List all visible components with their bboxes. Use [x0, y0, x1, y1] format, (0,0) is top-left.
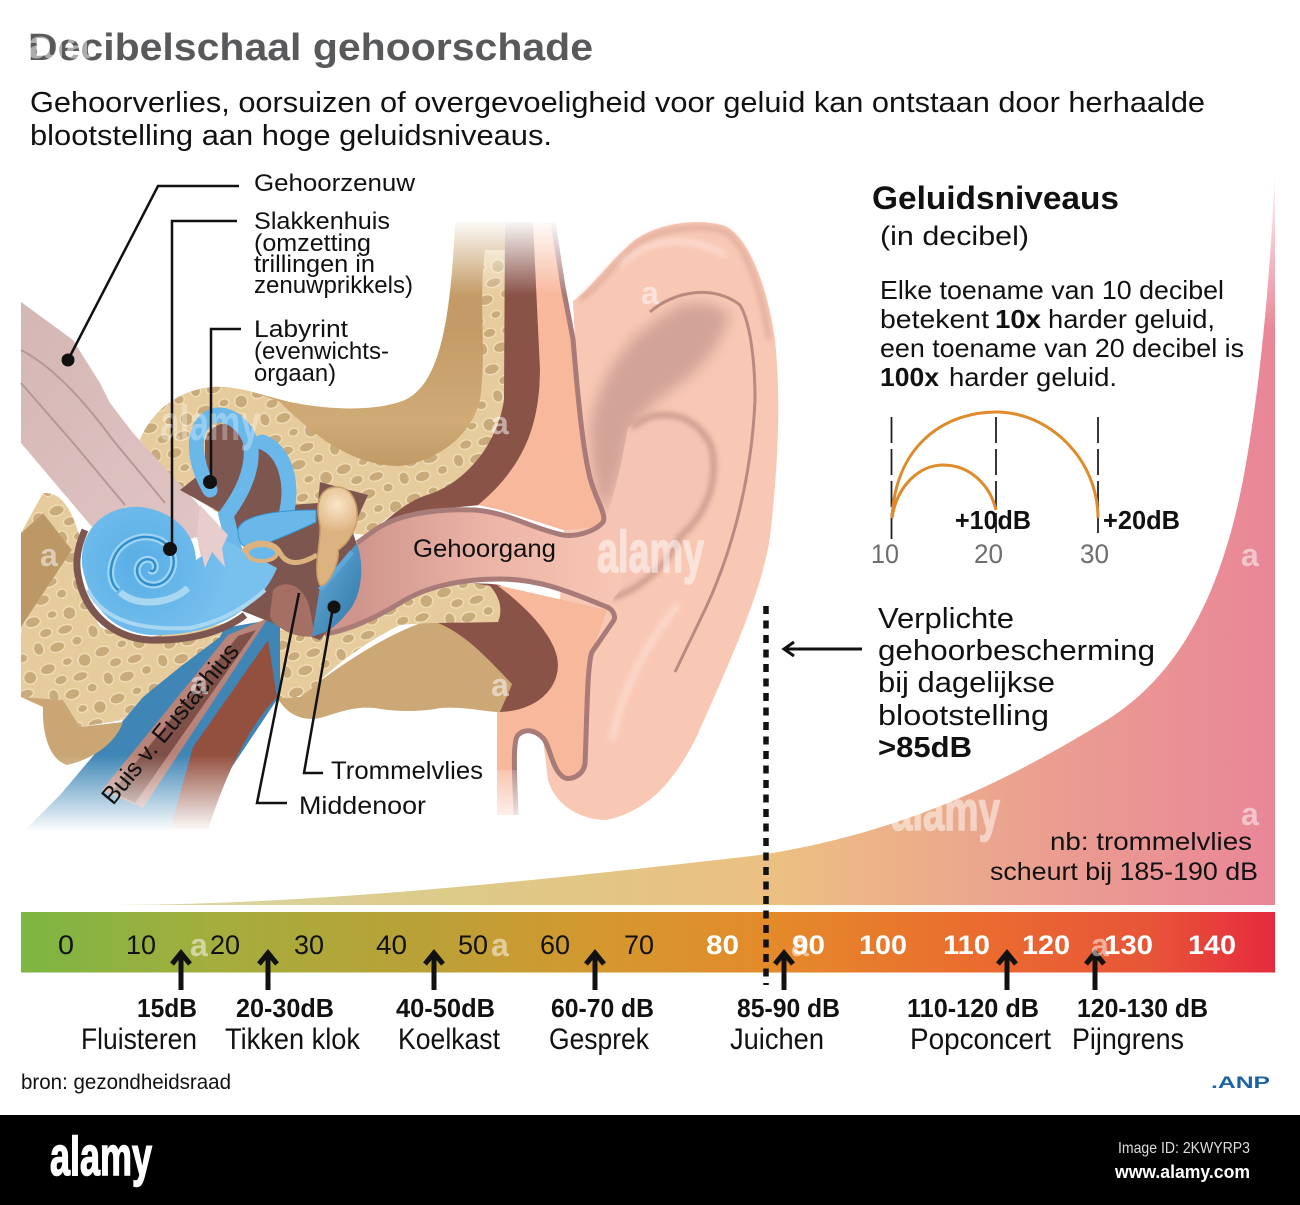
example: cheering: 85-90 dB	[737, 993, 840, 1023]
left bone, tan lump	[21, 697, 123, 765]
example: whisper	[81, 993, 197, 1056]
watermarks: alamy	[597, 520, 704, 585]
label: Labyrint	[254, 316, 389, 387]
example: pain threshold: 120-130 dB	[1077, 993, 1208, 1023]
watermarks: ala	[28, 23, 91, 67]
decibel scale numbers: 90	[792, 930, 825, 960]
outer ear (pinna)	[543, 222, 778, 820]
nerve fan fibres	[197, 505, 228, 568]
exponential loudness curve background	[100, 165, 1280, 905]
callout: mandatory hearing protection: gehoorbescherming	[878, 635, 1155, 667]
intro text: Gehoorverlies, oorsuizen of overgevoeligheid voor geluid kan ontstaan door herhaalde	[30, 87, 1205, 119]
label: Slakkenhuis: zenuwprikkels)	[254, 272, 413, 299]
concha bowl	[594, 414, 715, 600]
decibel scale numbers: 120	[1022, 930, 1070, 960]
threshold dotted line at 85 dB	[763, 606, 769, 985]
logo: ANP: .ANP	[1211, 1073, 1270, 1092]
example: ticking clock	[225, 993, 361, 1056]
note: eardrum rupture	[990, 828, 1258, 886]
label: Middenoor: Middenoor	[299, 792, 426, 820]
watermarks	[28, 23, 1259, 963]
middle ear cavity	[180, 424, 368, 640]
left bone, spongy	[21, 493, 227, 727]
leader: Gehoorzenuw	[62, 186, 239, 366]
helix rim shading	[580, 228, 769, 340]
example: cheering: Juichen	[730, 1023, 824, 1056]
decibel scale numbers: 30	[294, 930, 324, 960]
label: Labyrint: orgaan)	[254, 360, 336, 387]
example: fridge: 40-50dB	[396, 993, 495, 1023]
dark tissue above canal	[375, 222, 540, 530]
label: Slakkenhuis: Slakkenhuis	[254, 208, 390, 235]
example: whisper: Fluisteren	[81, 1023, 197, 1056]
concha shadow	[590, 303, 730, 515]
decibel scale numbers: 110	[943, 930, 990, 960]
explanation: Elke toename van 10 decibel	[880, 275, 1224, 305]
skin tissue below canal	[497, 585, 607, 815]
decibel arc diagram: 20	[974, 539, 1003, 569]
callout: mandatory hearing protection	[878, 603, 1155, 764]
explanation: 10x	[995, 304, 1042, 334]
label: Slakkenhuis: trillingen in	[254, 251, 375, 278]
leader: Labyrint	[203, 329, 241, 489]
example: pop concert: 110-120 dB	[907, 993, 1039, 1023]
watermarks: a	[1241, 796, 1259, 832]
antihelix rim line	[650, 292, 755, 672]
decibel scale numbers: 40	[376, 930, 407, 960]
leader: Slakkenhuis	[163, 221, 237, 556]
fade at bottom of section	[15, 755, 295, 833]
label: Buis v. Eustachius: Buis v. Eustachius	[96, 638, 245, 810]
watermarks: a	[641, 275, 659, 311]
malleus and incus	[317, 487, 357, 586]
example: pain threshold: Pijngrens	[1072, 1023, 1184, 1056]
helix highlight	[620, 241, 725, 265]
lower bone, spongy	[263, 583, 500, 698]
eardrum	[312, 543, 361, 636]
example: pop concert: Popconcert	[910, 1023, 1052, 1056]
decibel scale numbers: 20	[210, 930, 240, 960]
example: conversation: Gesprek	[549, 1023, 650, 1056]
example: cheering	[730, 993, 840, 1056]
decibel scale numbers: 140	[1188, 930, 1236, 960]
fade under ear lobe	[490, 770, 524, 830]
example: conversation: 60-70 dB	[551, 993, 654, 1023]
Eustachian tube, wall	[102, 618, 268, 808]
temporal bone, spongy layer	[140, 250, 506, 535]
arrow: callout to threshold line	[784, 642, 862, 656]
decibel colour bar	[21, 912, 1275, 972]
watermarks: alamy	[160, 395, 260, 451]
watermarks: a	[1241, 537, 1259, 573]
watermarks: a	[791, 927, 809, 963]
lower bone, tan	[277, 620, 512, 719]
bowl rim shadow	[612, 415, 714, 598]
footer logo: alamy	[50, 1125, 152, 1187]
watermarks: a	[190, 927, 208, 963]
label: Labyrint: (evenwichts-	[254, 338, 389, 365]
temporal bone, tan layer	[140, 222, 506, 500]
ear anatomy illustration	[15, 216, 778, 833]
decibel arc diagram: 30	[1080, 539, 1109, 569]
heading: Geluidsniveaus	[872, 180, 1119, 216]
canal base blob	[238, 510, 316, 548]
explanation: een toename van 20 decibel is	[880, 333, 1244, 363]
explanation: 100x	[880, 362, 940, 392]
middle ear tissue	[270, 584, 315, 637]
watermarks: a	[190, 665, 208, 701]
note: eardrum rupture: scheurt bij 185-190 dB	[990, 858, 1258, 886]
sub heading: (in decibel)	[880, 221, 1029, 251]
decibel scale numbers: 0	[58, 930, 74, 960]
watermarks: a	[491, 927, 509, 963]
source: bron: gezondheidsraad	[21, 1071, 231, 1094]
decibel scale numbers	[58, 930, 1236, 960]
skin tissue above canal	[478, 222, 603, 530]
cochlea	[77, 507, 277, 640]
explanation: harder geluid.	[949, 362, 1117, 392]
tissue below canal	[430, 583, 558, 712]
label: Gehoorgang: Gehoorgang	[413, 535, 556, 563]
leader: Middenoor	[257, 593, 299, 803]
note: eardrum rupture: nb: trommelvlies	[1050, 828, 1252, 856]
Eustachian tube, red-brown tissue	[170, 640, 277, 830]
stapes	[243, 543, 317, 563]
decibel arc diagram	[871, 412, 1180, 569]
example: fridge: Koelkast	[398, 1023, 501, 1056]
label: Trommelvlies: Trommelvlies	[331, 757, 483, 785]
decibel scale numbers: 10	[126, 930, 156, 960]
decibel scale numbers: 70	[624, 930, 654, 960]
callout: mandatory hearing protection: blootstelling	[878, 700, 1049, 732]
lobe highlight	[612, 605, 678, 740]
example: fridge	[396, 993, 501, 1056]
callout: mandatory hearing protection: >85dB	[878, 732, 972, 764]
decibel scale numbers: 50	[458, 930, 488, 960]
left bone, tan wedge	[21, 513, 72, 627]
intro text	[30, 87, 1205, 152]
scale arrows	[172, 953, 1104, 990]
example: whisper: 15dB	[137, 993, 197, 1023]
example: ticking clock: 20-30dB	[236, 993, 334, 1023]
fade at top of section	[450, 216, 568, 296]
decibel arc diagram: +20dB	[1103, 505, 1180, 535]
title: Decibelschaal gehoorschade	[28, 27, 593, 69]
example: ticking clock: Tikken klok	[225, 1023, 361, 1056]
example: pop concert	[907, 993, 1052, 1056]
label: Slakkenhuis: (omzetting	[254, 230, 371, 257]
leader: Trommelvlies	[304, 600, 340, 773]
label: Labyrint: Labyrint	[254, 316, 348, 343]
decibel scale numbers: 100	[859, 930, 907, 960]
decibel scale numbers: 130	[1104, 930, 1153, 960]
website: www.alamy.com	[1114, 1162, 1250, 1182]
decibel scale numbers: 80	[706, 930, 739, 960]
ear canal	[320, 510, 622, 636]
decibel arc diagram: +10dB	[955, 505, 1031, 535]
decibel arc diagram: 10	[871, 539, 899, 569]
Eustachian tube, blue outer	[25, 618, 280, 830]
callout: mandatory hearing protection: bij dagelijkse	[878, 667, 1055, 699]
callout: mandatory hearing protection: Verplichte	[878, 603, 1014, 635]
explanation	[880, 275, 1244, 392]
explanation: harder geluid,	[1048, 304, 1215, 334]
label: Slakkenhuis	[254, 208, 413, 299]
explanation: betekent	[880, 304, 990, 334]
Eustachian tube, lumen	[112, 630, 256, 803]
watermarks: a	[491, 405, 509, 441]
watermarks: a	[1091, 927, 1109, 963]
auditory nerve	[21, 302, 225, 567]
image id: Image ID: 2KWYRP3	[1118, 1140, 1250, 1157]
watermarks: a	[40, 537, 58, 573]
label: Gehoorzenuw: Gehoorzenuw	[254, 170, 416, 197]
semicircular canals	[196, 415, 289, 555]
watermarks: a	[491, 667, 509, 703]
decibel scale numbers: 60	[540, 930, 570, 960]
watermarks: alamy	[891, 779, 1000, 842]
panel: sound levels	[871, 180, 1244, 569]
stock footer bar	[0, 1115, 1300, 1205]
example: conversation	[549, 993, 654, 1056]
intro text: blootstelling aan hoge geluidsniveaus.	[30, 120, 552, 152]
canal walls	[325, 222, 615, 815]
example: pain threshold	[1072, 993, 1208, 1056]
